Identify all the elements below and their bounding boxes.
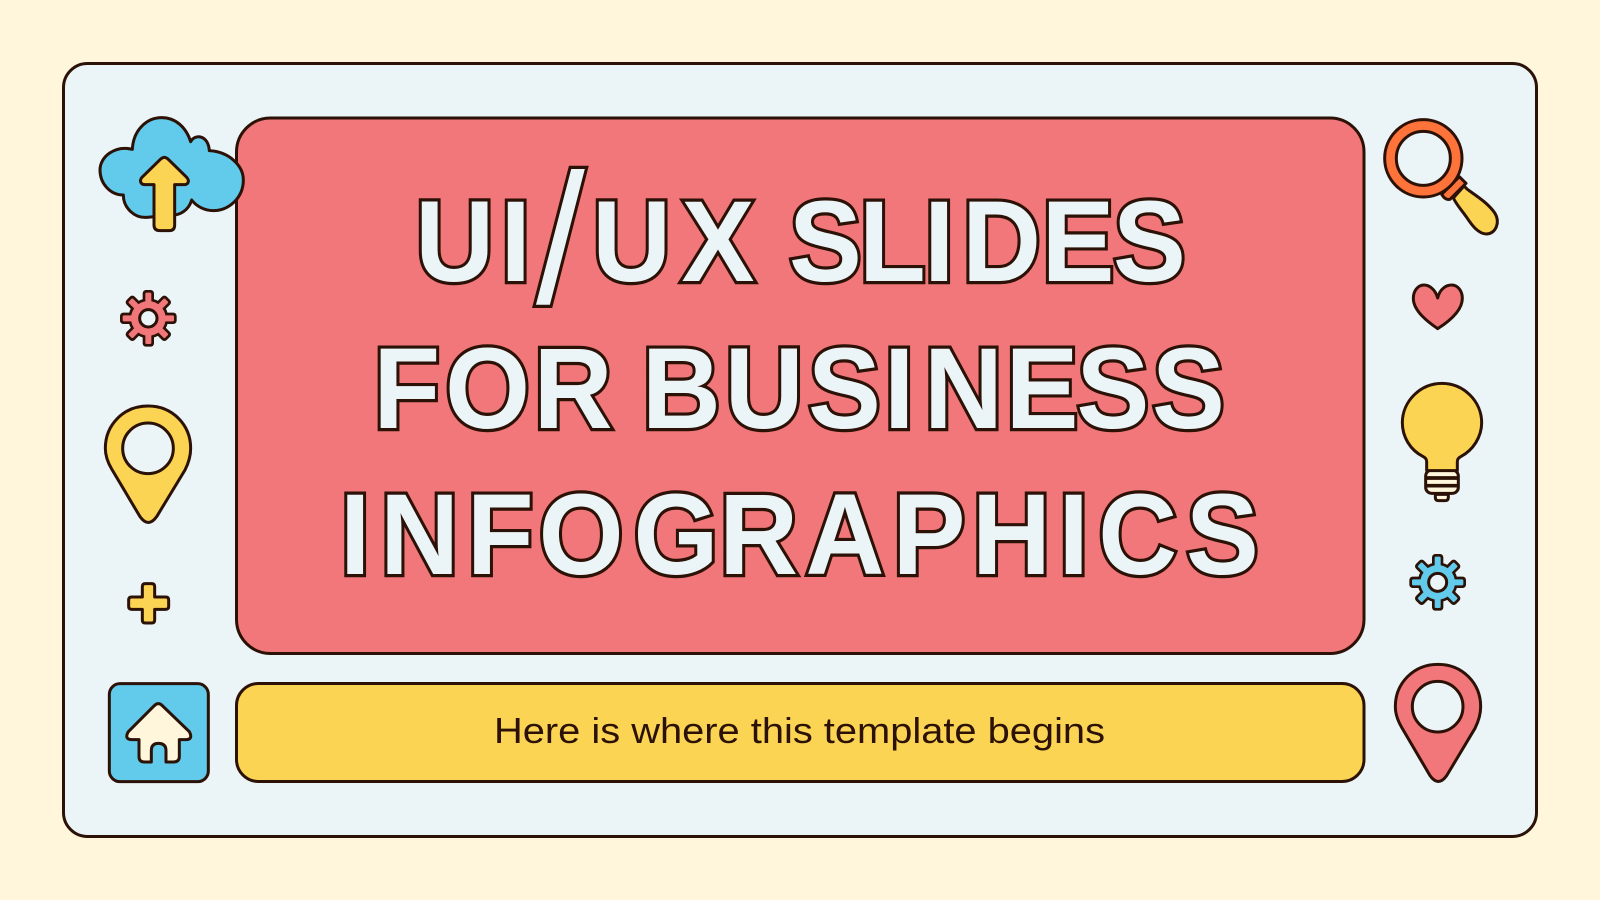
panel: subtitle bar	[236, 684, 1364, 782]
heading: title: UI	[415, 176, 531, 306]
panel: outer frame	[64, 64, 1536, 836]
icon: yellow map pin	[105, 406, 191, 522]
heading: title: /	[536, 137, 586, 343]
heading: title: INFOGRAPHICS	[340, 469, 1259, 599]
icon: blue gear	[1409, 554, 1466, 611]
icon: plus	[129, 584, 169, 623]
icon: light bulb	[1402, 383, 1482, 501]
icon: red map pin	[1395, 664, 1481, 781]
icon: heart	[1413, 285, 1462, 329]
heading: title: UX SLIDES	[592, 176, 1186, 306]
heading: title: FOR BUSINESS	[373, 323, 1225, 453]
icon: red gear	[120, 290, 177, 347]
subtitle text: Here is where this template begins	[494, 710, 1105, 751]
icon: magnifying glass	[1385, 120, 1497, 234]
icon: home button	[109, 684, 208, 782]
icon: cloud upload	[100, 118, 243, 231]
panel: title card	[236, 118, 1364, 654]
